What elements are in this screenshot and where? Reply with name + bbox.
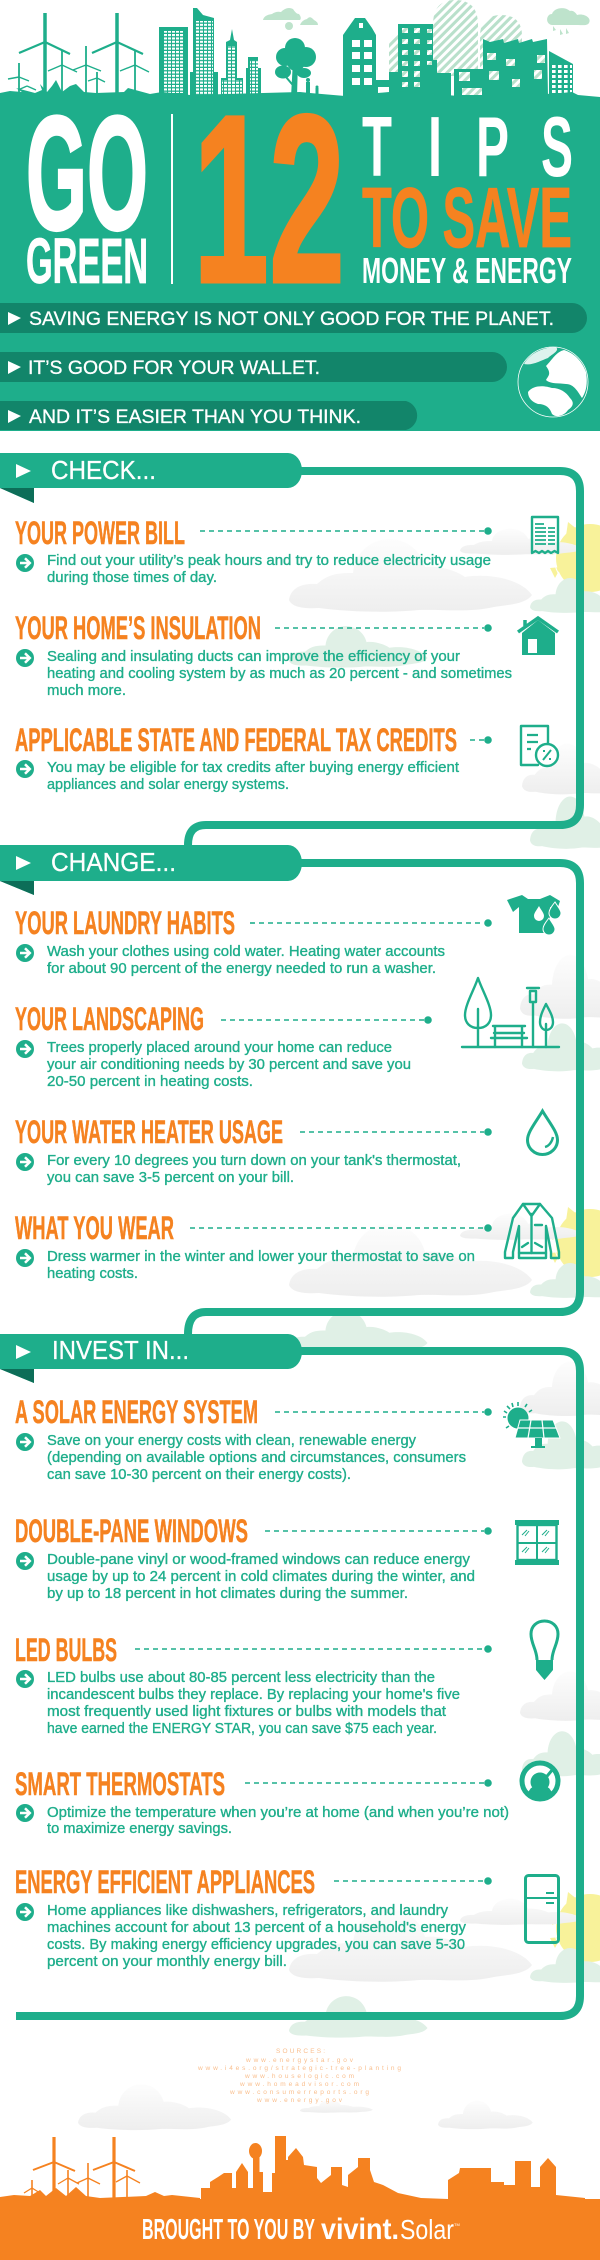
tip: energy efficient appliances: percent on your monthly energy bill.: [47, 1954, 287, 1970]
title divider: [171, 114, 173, 284]
tip: your home's insulation: YOUR HOME’S INSULATION: [15, 610, 261, 646]
tip: your power bill: YOUR POWER BILL: [15, 515, 185, 551]
footer skyline: [0, 2136, 585, 2200]
sources: www.consumerreports.org: [229, 2089, 369, 2096]
sources: www.homeadvisor.com: [239, 2081, 359, 2088]
tip: water heater: For every 10 degrees you turn down on your tank's thermostat,: [47, 1153, 461, 1169]
tip: double-pane windows: [15, 1513, 492, 1602]
tip: your landscaping: 20-50 percent in heating costs.: [47, 1074, 253, 1090]
tip: solar energy system: A SOLAR ENERGY SYSTEM: [15, 1394, 258, 1430]
tip: your home's insulation: [15, 610, 512, 699]
ribbon heading: [0, 845, 302, 895]
tip: your home's insulation: heating and cooling system by as much as 20 percent - and sometimes: [47, 666, 512, 682]
tip: led bulbs: incandescent bulbs they replace. By replacing your home's five: [47, 1687, 460, 1703]
tip: tax credits: appliances and solar energy systems.: [47, 777, 289, 793]
title: GO GREEN: GREEN: [26, 225, 148, 297]
tip: your power bill: [15, 515, 492, 586]
tip: water heater: [15, 1114, 492, 1186]
tip: your power bill: Find out your utility’s peak hours and try to reduce electricity usage: [47, 553, 491, 569]
tip: what you wear: [15, 1210, 492, 1282]
icon: globe: [518, 347, 588, 417]
ribbon heading: CHECK...: [51, 455, 156, 485]
tip: your landscaping: YOUR LANDSCAPING: [15, 1001, 204, 1037]
tip: your laundry habits: YOUR LAUNDRY HABITS: [15, 905, 235, 941]
section frame: [188, 863, 580, 1334]
title: tips to save money and energy: S: [541, 100, 573, 195]
grass: [0, 2187, 200, 2200]
panel: change: [0, 845, 580, 1334]
factory: [454, 39, 548, 97]
tip: led bulbs: most frequently used light fixtures or bulbs with models that: [47, 1704, 446, 1720]
tip: what you wear: Dress warmer in the winter and lower your thermostat to save on: [47, 1249, 475, 1265]
icon: shirt: [507, 895, 561, 935]
footer band: [0, 2199, 600, 2260]
towers: [159, 8, 261, 97]
sources: www.energy.gov: [256, 2097, 343, 2104]
tip: led bulbs: LED bulbs use about 80-85 percent less electricity than the: [47, 1670, 435, 1686]
intro line 1: [0, 303, 587, 333]
icon: light bulb: [531, 1621, 558, 1680]
right building: [549, 51, 573, 97]
ribbon heading: [0, 1334, 302, 1383]
sources: www.i4es.org/strategic-tree-planting: [197, 2065, 401, 2072]
tip: double-pane windows: usage by up to 24 percent in cold climates during the winter, and: [47, 1569, 475, 1585]
tip: led bulbs: LED BULBS: [15, 1632, 117, 1668]
tip: solar energy system: (depending on available options and circumstances, consumers: [47, 1450, 466, 1466]
title: tips to save money and energy: P: [476, 100, 509, 195]
icon: bill: [532, 517, 558, 553]
footer band: BROUGHT TO YOU BY: [142, 2214, 315, 2246]
tip: double-pane windows: Double-pane vinyl or wood-framed windows can reduce energy: [47, 1552, 471, 1568]
tip: led bulbs: have earned the ENERGY STAR, you can save $75 each year.: [47, 1721, 437, 1737]
intro line 2: IT’S GOOD FOR YOUR WALLET.: [28, 358, 320, 379]
tip: energy efficient appliances: Home appliances like dishwashers, refrigerators, and laundry: [47, 1903, 449, 1919]
tip: energy efficient appliances: [15, 1864, 492, 1970]
title: 12: 12: [193, 65, 345, 333]
sources: [197, 2048, 401, 2104]
intro line 1: SAVING ENERGY IS NOT ONLY GOOD FOR THE PLANET.: [29, 309, 554, 330]
wind turbines: [8, 13, 149, 97]
tree and people: [275, 38, 318, 97]
ribbon heading: [0, 453, 302, 503]
sources: www.houselogic.com: [244, 2073, 354, 2080]
intro line 2: [0, 352, 507, 382]
icon: window: [515, 1520, 559, 1565]
tip: solar energy system: can save 10-30 percent on their energy costs).: [47, 1467, 351, 1483]
sources: SOURCES:: [276, 2048, 325, 2055]
header band: [0, 97, 600, 431]
top clouds: [263, 8, 590, 35]
section frame: [16, 1351, 580, 2016]
icon: park: [462, 978, 559, 1047]
tip: water heater: you can save 3-5 percent on your bill.: [47, 1170, 294, 1186]
icon: solar panel: [503, 1402, 560, 1448]
icon: tax document: [521, 726, 558, 766]
footer band: vivint.: [321, 2213, 399, 2246]
tip: what you wear: heating costs.: [47, 1266, 138, 1282]
title: tips to save money and energy: I: [428, 100, 442, 195]
tip: your laundry habits: for about 90 percent of the energy needed to run a washer.: [47, 961, 436, 977]
grass: [0, 80, 600, 98]
panel: check: [0, 453, 580, 845]
icon: jacket: [505, 1204, 559, 1258]
header skyline: [0, 0, 600, 98]
tip: your laundry habits: [15, 905, 492, 977]
intro line 3: [0, 401, 417, 430]
tip: energy efficient appliances: machines account for about 13 percent of a household's energy: [47, 1920, 467, 1936]
tip: led bulbs: [15, 1632, 492, 1737]
wind turbines: [24, 2137, 140, 2200]
icon: house: [518, 618, 558, 655]
tip: your landscaping: [15, 1001, 432, 1090]
icon: thermostat: [522, 1763, 558, 1800]
tip: solar energy system: Save on your energy costs with clean, renewable energy: [47, 1433, 417, 1449]
tip: smart thermostats: [15, 1766, 509, 1837]
tip: double-pane windows: by up to 18 percent in hot climates during the summer.: [47, 1586, 408, 1602]
ribbon heading: CHANGE...: [51, 847, 176, 877]
tip: your laundry habits: Wash your clothes using cold water. Heating water accounts: [47, 944, 445, 960]
panel: invest in: [0, 1334, 580, 2016]
title: tips to save money and energy: T: [362, 100, 392, 195]
icon: fridge: [526, 1876, 558, 1942]
tip: smart thermostats: Optimize the temperature when you’re at home (and when you’re not): [47, 1805, 509, 1821]
tip: tax credits: [15, 722, 492, 793]
tip: double-pane windows: DOUBLE-PANE WINDOWS: [15, 1513, 248, 1549]
title: GO GREEN: [26, 83, 148, 297]
tip: solar energy system: [15, 1394, 492, 1483]
tip: your power bill: during those times of day.: [47, 570, 217, 586]
sources: www.energystar.gov: [245, 2057, 354, 2064]
section frame: [188, 471, 580, 845]
tip: your landscaping: your air conditioning needs by 30 percent and save you: [47, 1057, 411, 1073]
tip: energy efficient appliances: ENERGY EFFICIENT APPLIANCES: [15, 1864, 315, 1900]
tip: what you wear: WHAT YOU WEAR: [15, 1210, 174, 1246]
ribbon heading: INVEST IN...: [52, 1335, 189, 1365]
tip: water heater: YOUR WATER HEATER USAGE: [15, 1114, 283, 1150]
title: tips to save money and energy: [362, 100, 573, 291]
tip: your home's insulation: much more.: [47, 683, 126, 699]
city silhouette: [201, 2136, 585, 2200]
city buildings: [343, 18, 451, 97]
icon: water drop: [528, 1111, 558, 1154]
background clouds and suns: [78, 522, 600, 2130]
intro line 3: AND IT’S EASIER THAN YOU THINK.: [29, 407, 361, 428]
tip: smart thermostats: SMART THERMOSTATS: [15, 1766, 225, 1802]
striped hills: [389, 0, 522, 76]
tip: your home's insulation: Sealing and insulating ducts can improve the efficiency of your: [47, 649, 460, 665]
footer band: Solar: [400, 2214, 454, 2245]
tip: energy efficient appliances: costs. By making energy efficiency upgrades, you can save 5-30: [47, 1937, 465, 1953]
tip: smart thermostats: to maximize energy savings.: [47, 1821, 232, 1837]
text: GO: [26, 83, 148, 264]
footer band: TM: [454, 2222, 460, 2227]
tip: tax credits: You may be eligible for tax credits after buying energy efficient: [47, 760, 459, 776]
tip: your landscaping: Trees properly placed around your home can reduce: [47, 1040, 392, 1056]
